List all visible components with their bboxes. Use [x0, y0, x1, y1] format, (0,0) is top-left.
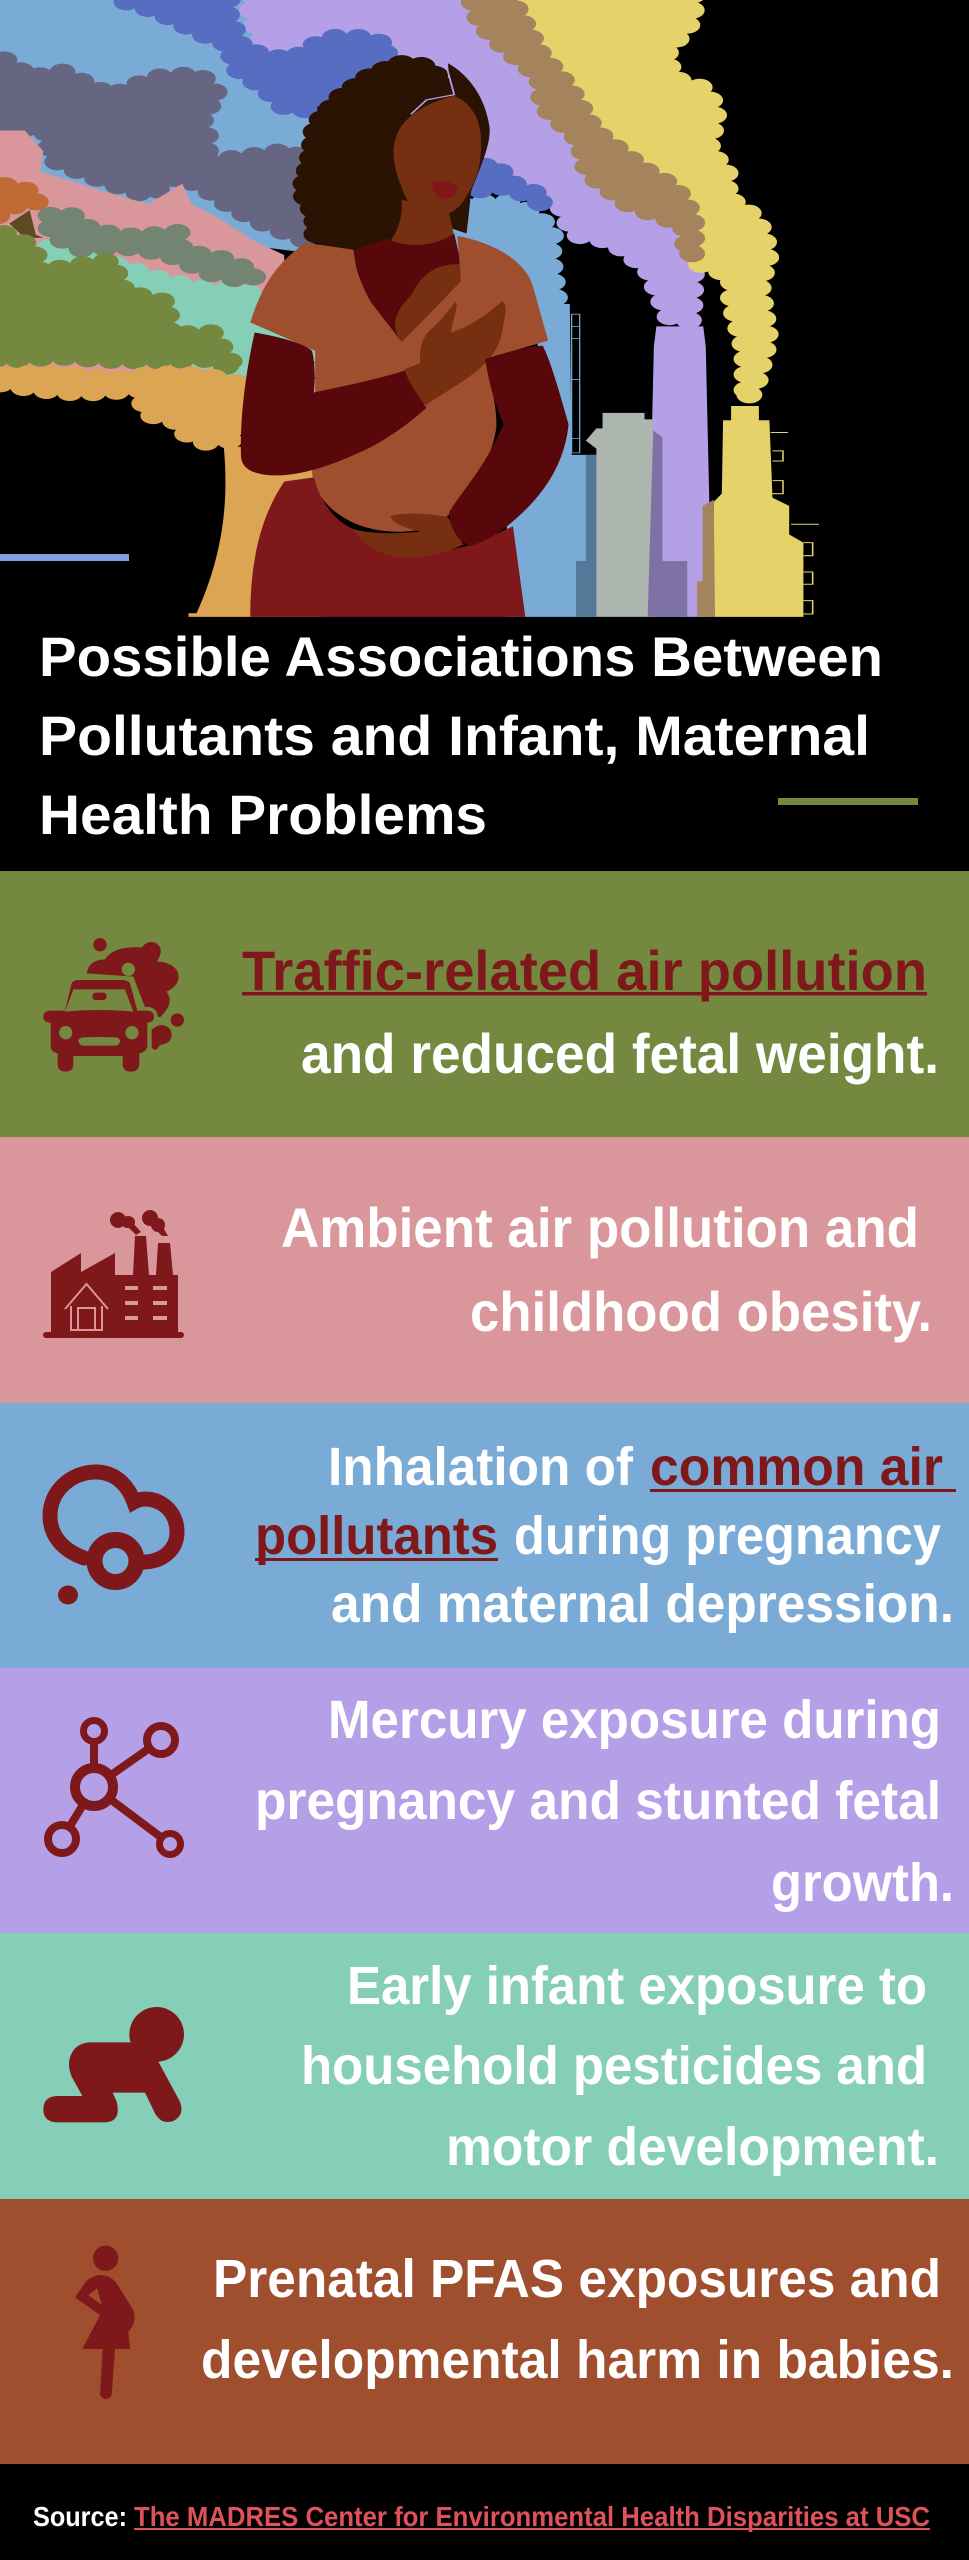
smoke: yellow plume [516, 0, 766, 399]
accent bar: blue [0, 554, 129, 561]
hair: left part [305, 64, 450, 246]
mother [241, 63, 569, 617]
smoke: olive green cloud [0, 233, 235, 369]
text: childhood obesity. [470, 1280, 932, 1343]
panel background [0, 1668, 969, 1933]
text: household pesticides and [301, 2036, 927, 2096]
smoke: tan plume [468, 0, 692, 256]
smoke: slate grey cloud [0, 59, 309, 242]
face [394, 96, 481, 217]
hand on belly [353, 514, 464, 558]
stack: yellow [714, 406, 819, 617]
smoke: orange blob [0, 186, 38, 217]
stack: grey tower [586, 413, 653, 617]
stack: purple shadow [648, 430, 687, 617]
text: during pregnancy [514, 1506, 941, 1566]
text [255, 1690, 954, 1913]
left sleeve [241, 333, 426, 475]
icon: pregnant woman [75, 2246, 135, 2399]
smoke: purple plume and stack [252, 0, 712, 617]
text: and maternal depression. [331, 1574, 954, 1634]
text [255, 1437, 956, 1634]
panel background [0, 1933, 969, 2199]
text [281, 1196, 932, 1343]
hand on chest [405, 301, 506, 405]
stack: blue [507, 304, 596, 617]
panel background [0, 871, 969, 1137]
text: Traffic-related air pollution [242, 939, 927, 1002]
panel: household pesticides [0, 1933, 969, 2199]
title: Health Problems [39, 783, 487, 846]
icon: car with smoke [43, 938, 184, 1072]
right sleeve [449, 346, 569, 546]
text: motor development. [446, 2117, 939, 2177]
panel background [0, 1403, 969, 1668]
text: Inhalation of [328, 1437, 634, 1497]
headband [411, 65, 454, 114]
smoke: teal cloud [48, 248, 309, 388]
icon: thought cloud [50, 1472, 177, 1604]
panel: ambient air pollution [0, 1137, 969, 1403]
stack: tan side [697, 500, 715, 617]
smoke: sky blue [0, 0, 315, 253]
text: Prenatal PFAS exposures and [213, 2249, 941, 2309]
accent bar: green [778, 798, 918, 805]
title: Pollutants and Infant, Maternal [39, 704, 870, 767]
panel background [0, 1137, 969, 1403]
panel: mercury exposure [0, 1668, 969, 1933]
chest skin [395, 264, 461, 342]
text: growth. [771, 1853, 954, 1913]
text: Early infant exposure to [347, 1956, 927, 2016]
text: Mercury exposure during [328, 1690, 941, 1750]
text: developmental harm in babies. [201, 2330, 954, 2390]
text [201, 2249, 954, 2390]
cape and belly [250, 236, 548, 532]
smoke: royal blue [105, 0, 543, 204]
text: pollutants [255, 1506, 498, 1566]
panel: prenatal PFAS [0, 2199, 969, 2464]
text: pregnancy and stunted fetal [255, 1771, 941, 1831]
title [39, 625, 883, 846]
cooling tower and smoke: orange [0, 374, 321, 617]
title: Possible Associations Between [39, 625, 883, 688]
smoke: blue plume behind mother [457, 202, 555, 326]
text [242, 939, 939, 1085]
smoke: grey green cloud [51, 213, 256, 282]
neck [391, 200, 454, 246]
icon: molecule [48, 1720, 180, 1854]
skirt [250, 477, 525, 617]
panel: traffic-related air pollution [0, 871, 969, 1137]
icon: crawling baby [43, 2007, 184, 2122]
stack: dark blue shadow [576, 455, 596, 617]
text: common air [650, 1437, 943, 1497]
text [301, 1956, 939, 2177]
icon: factory [43, 1210, 184, 1338]
smoke: dark overlap [9, 210, 43, 238]
panel: common air pollutants [0, 1403, 969, 1668]
maroon top [352, 233, 462, 342]
text: Ambient air pollution and [281, 1196, 919, 1259]
hair: right part [413, 63, 490, 233]
smoke: pink cloud [0, 131, 284, 379]
source line: Source: [33, 2501, 127, 2532]
text: and reduced fetal weight. [301, 1022, 939, 1085]
panel background [0, 2199, 969, 2464]
illustration: mother and smokestacks [0, 0, 819, 617]
lips [431, 180, 459, 200]
